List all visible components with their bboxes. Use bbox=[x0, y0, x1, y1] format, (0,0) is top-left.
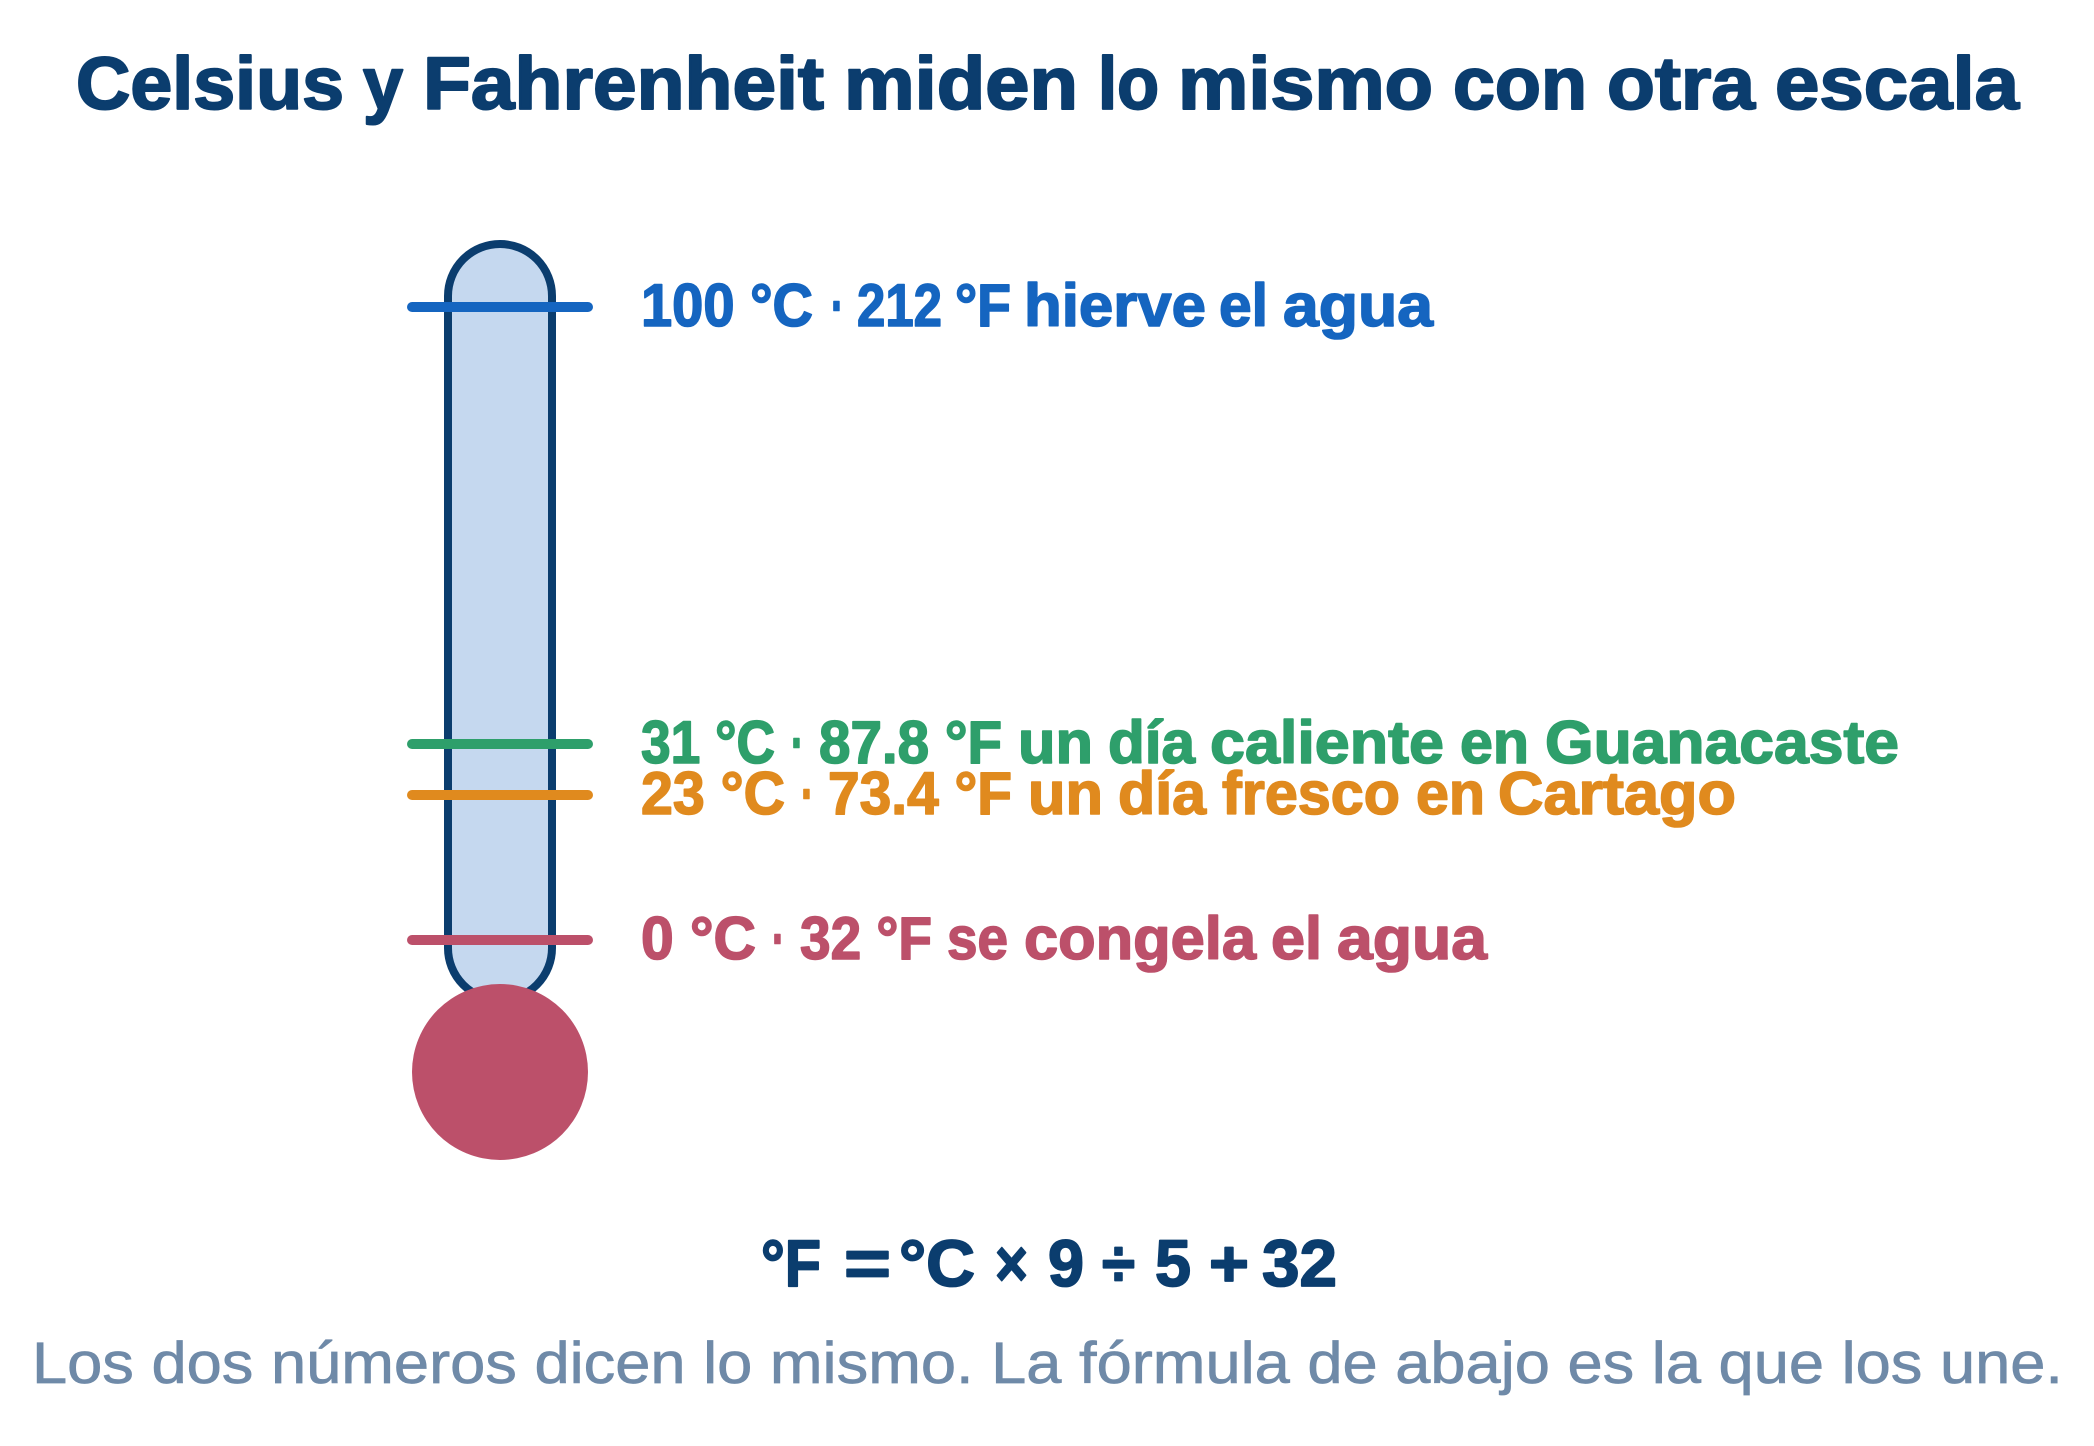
label: 100 °C: 100 °C bbox=[641, 272, 813, 339]
label: 23 °C: en bbox=[1416, 760, 1485, 827]
label: 31 °C bbox=[641, 709, 1899, 776]
label: 23 °C: un bbox=[1028, 760, 1103, 827]
title: y bbox=[363, 42, 403, 125]
formula: 32 bbox=[1262, 1226, 1337, 1300]
tick: 31 °C bbox=[412, 739, 588, 749]
tick: 100 °C bbox=[412, 302, 588, 312]
formula: °F bbox=[761, 1226, 821, 1300]
title: con bbox=[1453, 42, 1587, 125]
label: 0 °C: se bbox=[947, 905, 1008, 972]
label: 23 °C: Cartago bbox=[1498, 760, 1736, 827]
label: 100 °C: · bbox=[831, 272, 844, 339]
label: 23 °C: 73.4 °F bbox=[828, 760, 1012, 827]
title: escala bbox=[1775, 42, 2020, 125]
formula: ÷ bbox=[1102, 1226, 1135, 1300]
title: miden bbox=[844, 42, 1078, 125]
title bbox=[76, 42, 2020, 125]
label: 31 °C: en bbox=[1460, 709, 1529, 776]
label: 0 °C: agua bbox=[1337, 905, 1488, 972]
label: 100 °C: hierve bbox=[1024, 272, 1206, 339]
title: Celsius bbox=[76, 42, 344, 125]
label: 23 °C: día bbox=[1118, 760, 1207, 827]
label: 31 °C: 87.8 °F bbox=[819, 709, 1002, 776]
label: 100 °C: 212 bbox=[857, 272, 942, 339]
label: 31 °C: caliente bbox=[1210, 709, 1444, 776]
label: 0 °C: 32 °F bbox=[800, 905, 932, 972]
label: 0 °C: · bbox=[772, 905, 785, 972]
thermometer bbox=[412, 244, 588, 1160]
label: 31 °C: · bbox=[791, 709, 804, 776]
formula: 5 bbox=[1155, 1226, 1191, 1300]
label: 31 °C: día bbox=[1108, 709, 1196, 776]
formula: + bbox=[1209, 1226, 1249, 1300]
thermometer tube bbox=[448, 244, 552, 1000]
subtitle: Los dos números dicen lo mismo. La fórmula de abajo es la que los une. bbox=[32, 1331, 2063, 1396]
label: 100 °C: el bbox=[1219, 272, 1268, 339]
label: 100 °C bbox=[641, 272, 1434, 339]
thermometer bulb bbox=[412, 984, 588, 1160]
title: lo bbox=[1098, 42, 1159, 125]
label: 23 °C bbox=[641, 760, 1736, 827]
label: 100 °C: agua bbox=[1283, 272, 1434, 339]
label: 31 °C: un bbox=[1018, 709, 1093, 776]
label: 31 °C: Guanacaste bbox=[1545, 709, 1899, 776]
label: 100 °C: °F bbox=[955, 272, 1011, 339]
label: 23 °C: · bbox=[801, 760, 814, 827]
label: 0 °C: congela bbox=[1024, 905, 1257, 972]
label: 31 °C: 31 °C bbox=[641, 709, 775, 776]
title: Fahrenheit bbox=[423, 42, 824, 125]
label: 0 °C: el bbox=[1271, 905, 1322, 972]
formula: × bbox=[995, 1226, 1028, 1300]
formula bbox=[761, 1226, 1337, 1300]
formula: 9 bbox=[1048, 1226, 1084, 1300]
title: otra bbox=[1607, 42, 1756, 125]
formula: = bbox=[844, 1226, 891, 1300]
label: 23 °C: fresco bbox=[1222, 760, 1400, 827]
label: 0 °C: 0 °C bbox=[641, 905, 756, 972]
formula: °C bbox=[899, 1226, 975, 1300]
title: mismo bbox=[1178, 42, 1433, 125]
tick: 0 °C bbox=[412, 935, 588, 945]
label: 23 °C: 23 °C bbox=[641, 760, 785, 827]
tick: 23 °C bbox=[412, 790, 588, 800]
label: 0 °C bbox=[641, 905, 1488, 972]
